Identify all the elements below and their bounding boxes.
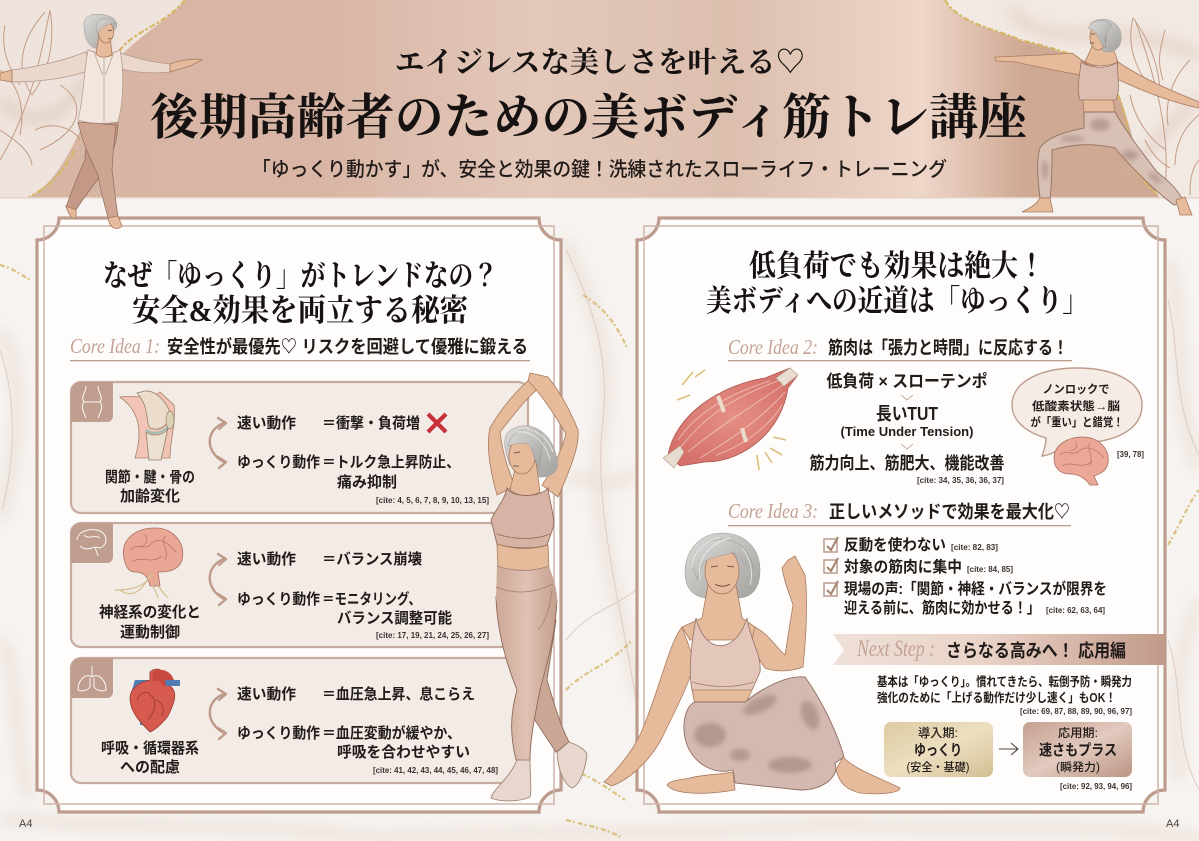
core idea 3 heading: Core Idea 3:: [728, 499, 818, 523]
panel: nerves row: [71, 523, 528, 647]
checklist: 迎える前に、筋肉に効かせる！」: [844, 598, 1040, 617]
panel: left card frame: [37, 218, 561, 812]
icon: muscle: [663, 368, 798, 470]
advanced phase box: 速さもプラス: [1039, 742, 1117, 759]
main title: 後期高齢者のための美ボディ筋トレ講座: [150, 90, 1029, 145]
speech bubble: ノンロックで: [1042, 383, 1110, 396]
text: fast: 速い動作: [237, 551, 296, 568]
speech bubble: 低酸素状態→脳: [1032, 399, 1121, 413]
text: slow: ＝血圧変動が緩やか、: [322, 724, 461, 742]
label: joints: [105, 468, 195, 505]
label: nerves: 運動制御: [120, 623, 180, 641]
figure: warrior pose woman: [995, 19, 1199, 215]
arrow: split: [210, 554, 226, 605]
icon: brain: [1054, 437, 1108, 485]
label: nerves: 神経系の変化と: [99, 603, 201, 621]
intro phase box: (安全・基礎): [906, 760, 970, 774]
right heading: 低負荷でも効果は絶大！: [749, 250, 1045, 283]
checklist: [824, 536, 1107, 617]
flow: TUT explanation: 筋力向上、筋肥大、機能改善: [810, 453, 1004, 473]
left heading: [103, 260, 498, 328]
text: fast: [237, 685, 475, 703]
leaf decoration: left: [0, 10, 80, 165]
text: slow: [237, 453, 460, 491]
figure: balancing woman in jacket: [0, 14, 202, 228]
arrow: [999, 743, 1018, 755]
header banner: [0, 0, 1199, 198]
figure: seated woman: [604, 533, 900, 794]
arrow: split: [210, 689, 226, 739]
advanced phase box: (瞬発力): [1056, 760, 1100, 774]
core idea 1 heading: Core Idea 1:: [70, 334, 160, 358]
label: joints: 関節・腱・骨の: [105, 468, 195, 486]
flow: TUT explanation: 長いTUT: [876, 404, 938, 424]
label: circulation: への配慮: [120, 758, 180, 776]
text: slow: [237, 590, 452, 627]
text: fast: ＝血圧急上昇、息こらえ: [322, 685, 475, 703]
checklist: 現場の声:「関節・神経・バランスが限界を: [844, 579, 1107, 598]
left heading: なぜ「ゆっくり」がトレンドなの？: [103, 260, 498, 293]
intro phase box: [884, 722, 993, 777]
text: fast: [237, 414, 420, 432]
subtitle: 「ゆっくり動かす」が、安全と効果の鍵！洗練されたスローライフ・トレーニング: [252, 158, 947, 181]
page label left: A4: [19, 818, 32, 830]
advanced phase box: [1023, 722, 1132, 777]
right heading: [706, 250, 1088, 318]
core idea 2 heading: [728, 335, 1072, 361]
citation: [cite: 41, 42, 43, 44, 45, 46, 47, 48]: [373, 765, 498, 775]
next step ribbon: [833, 634, 1165, 665]
figure: standing stretching woman: [488, 373, 587, 801]
icon: knee illustration: [120, 391, 174, 460]
arrow: split: [210, 418, 226, 468]
core idea 3 heading: [728, 499, 1071, 526]
checklist: [cite: 84, 85]: [967, 564, 1013, 574]
next step text: 基本は「ゆっくり」。慣れてきたら、転倒予防・瞬発力: [877, 674, 1132, 689]
speech bubble: が「重い」と錯覚！: [1030, 415, 1124, 429]
text: slow: ゆっくり動作: [237, 725, 320, 742]
citation: brain: [39, 78]: [1117, 449, 1144, 459]
label: joints: 加齢変化: [120, 487, 180, 505]
text: slow: 呼吸を合わせやすい: [337, 744, 470, 761]
checklist: 反動を使わない: [844, 536, 946, 554]
core idea 1 heading: 安全性が最優先♡ リスクを回避して優雅に鍛える: [167, 336, 528, 357]
next step text: [cite: 69, 87, 88, 89, 90, 96, 97]: [1020, 706, 1132, 716]
flow: TUT explanation: 低負荷 × スローテンポ: [826, 371, 988, 391]
text: slow: ゆっくり動作: [237, 591, 320, 608]
panel: joints row: [71, 382, 528, 513]
citation: phases: [cite: 92, 93, 94, 96]: [1060, 781, 1132, 791]
text: fast: ＝バランス崩壊: [322, 550, 422, 568]
text: fast: 速い動作: [237, 415, 296, 432]
core idea 3 heading: 正しいメソッドで効果を最大化♡: [829, 502, 1070, 522]
left heading: 安全&効果を両立する秘密: [132, 293, 470, 328]
icon: brain tab: [71, 523, 113, 563]
citation: [cite: 4, 5, 6, 7, 8, 9, 10, 13, 15]: [376, 495, 489, 505]
flow: TUT explanation: (Time Under Tension): [840, 424, 974, 439]
text: fast: [237, 550, 422, 568]
core idea 1 heading: [70, 334, 530, 361]
next step ribbon: Next Step :: [856, 636, 935, 661]
text: fast: 速い動作: [237, 686, 296, 703]
icon: joint tab: [71, 382, 113, 422]
panel: right card frame: [637, 218, 1165, 812]
right heading: 美ボディへの近道は「ゆっくり」: [706, 285, 1088, 318]
checklist: [cite: 62, 63, 64]: [1046, 605, 1105, 615]
next step ribbon: さらなる高みへ！ 応用編: [946, 641, 1126, 661]
text: slow: ＝モニタリング、: [322, 590, 421, 608]
text: slow: ＝トルク急上昇防止、: [322, 453, 460, 471]
text: slow: [237, 724, 470, 761]
intro phase box: 導入期:: [918, 725, 958, 740]
advanced phase box: 応用期:: [1058, 726, 1098, 740]
flow: TUT explanation: [cite: 34, 35, 36, 36, 37]: [917, 475, 1004, 485]
icon: lungs tab: [71, 658, 113, 698]
text: slow: ゆっくり動作: [237, 454, 320, 471]
core idea 2 heading: Core Idea 2:: [728, 335, 818, 359]
icon: brain illustration: [115, 528, 183, 598]
panel: circulation row: [71, 658, 528, 783]
core idea 2 heading: 筋肉は「張力と時間」に反応する！: [828, 338, 1068, 358]
citation: [cite: 17, 19, 21, 24, 25, 26, 27]: [376, 630, 489, 640]
title kicker: エイジレスな美しさを叶える♡: [395, 46, 805, 79]
checklist: 対象の筋肉に集中: [844, 557, 962, 576]
checklist: [cite: 82, 83]: [951, 542, 998, 552]
text: slow: バランス調整可能: [337, 609, 452, 627]
label: circulation: [101, 739, 199, 776]
icon: red cross: [428, 414, 446, 432]
page label right: A4: [1166, 818, 1179, 830]
intro phase box: ゆっくり: [914, 742, 962, 759]
next step text: [877, 674, 1132, 716]
title block: [150, 46, 1029, 181]
label: nerves: [99, 603, 201, 641]
flow: TUT explanation: [810, 371, 1004, 485]
text: slow: 痛み抑制: [337, 473, 397, 491]
icon: heart illustration: [130, 669, 180, 732]
speech bubble: [1012, 368, 1142, 456]
next step text: 強化のために「上げる動作だけ少し速く」もOK！: [877, 690, 1116, 705]
text: fast: ＝衝撃・負荷増: [322, 414, 420, 432]
label: circulation: 呼吸・循環器系: [101, 739, 199, 757]
leaf decoration: right: [1130, 18, 1199, 195]
